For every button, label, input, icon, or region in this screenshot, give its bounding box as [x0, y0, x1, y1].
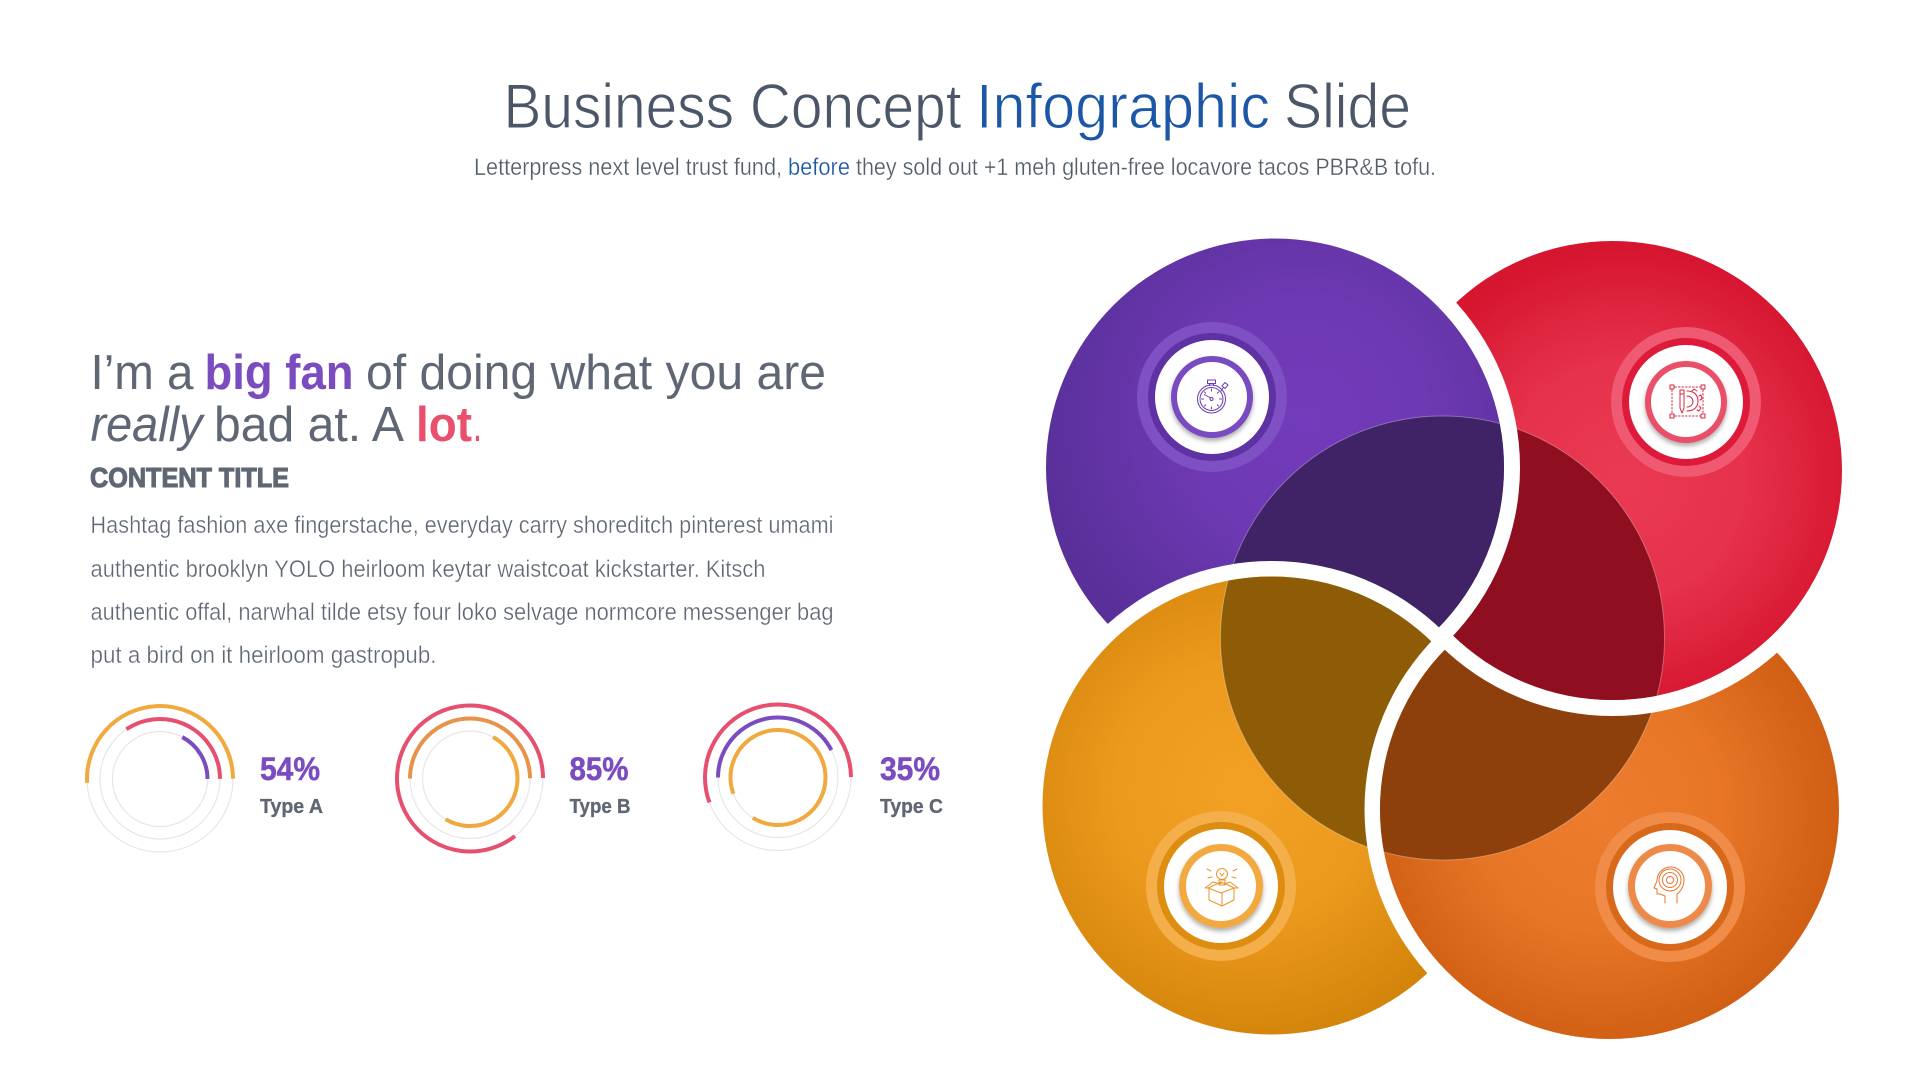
- heading: of doing what you are: [366, 346, 826, 400]
- petal: yellow: [1042, 576, 1432, 1034]
- petal: red: [1453, 241, 1842, 700]
- subtitle: they sold out +1 meh gluten-free locavore tacos PBR&B tofu.: [856, 154, 1436, 181]
- icon: head with maze: [1654, 867, 1684, 903]
- heading: lot: [416, 398, 472, 452]
- stat: Type B: 85%: [570, 751, 628, 787]
- body paragraph: Hashtag fashion axe fingerstache, everyday carry shoreditch pinterest umami: [90, 512, 834, 539]
- subtitle: before: [788, 154, 850, 181]
- radial chart: Type A: [77, 696, 243, 862]
- badge: idea box: [1146, 811, 1296, 961]
- petal: orange: [1380, 650, 1839, 1039]
- stat: Type B: Type B: [570, 796, 630, 818]
- radial chart: Type B: [368, 676, 572, 881]
- stat: Type A: 54%: [260, 751, 320, 787]
- diagram: interlocking circles: [1042, 238, 1842, 1039]
- heading: .: [473, 398, 482, 452]
- badge: mind maze: [1595, 812, 1745, 962]
- body paragraph: [90, 512, 834, 669]
- heading: really: [90, 398, 205, 452]
- subtitle: [474, 154, 1436, 181]
- body paragraph: put a bird on it heirloom gastropub.: [90, 642, 436, 669]
- body paragraph: authentic brooklyn YOLO heirloom keytar waistcoat kickstarter. Kitsch: [90, 556, 766, 583]
- heading: big fan: [204, 346, 354, 400]
- stat: Type C: Type C: [880, 796, 943, 818]
- stat: Type C: 35%: [880, 751, 940, 787]
- title: Slide: [1284, 72, 1411, 142]
- radial chart: Type C: [684, 684, 872, 871]
- heading: [90, 346, 826, 452]
- icon: stopwatch: [1198, 380, 1228, 413]
- heading: bad at. A: [214, 398, 404, 452]
- body paragraph: authentic offal, narwhal tilde etsy four loko selvage normcore messenger bag: [90, 599, 834, 626]
- content title: CONTENT TITLE: [90, 462, 289, 493]
- title: Infographic: [976, 72, 1270, 142]
- heading: I’m a: [90, 346, 194, 400]
- petal: purple: [1046, 238, 1504, 628]
- stat: Type C: [880, 751, 943, 818]
- icon: light bulb in box: [1205, 868, 1238, 906]
- subtitle: Letterpress next level trust fund,: [474, 154, 782, 181]
- badge: stopwatch: [1137, 322, 1287, 472]
- badge: design gear: [1611, 327, 1761, 477]
- title: Business Concept: [504, 72, 962, 142]
- stat: Type A: Type A: [260, 796, 323, 818]
- title: [504, 72, 1411, 142]
- icon: pencil and gear: [1670, 385, 1705, 418]
- stat: Type A: [260, 751, 323, 818]
- stat: Type B: [570, 751, 630, 818]
